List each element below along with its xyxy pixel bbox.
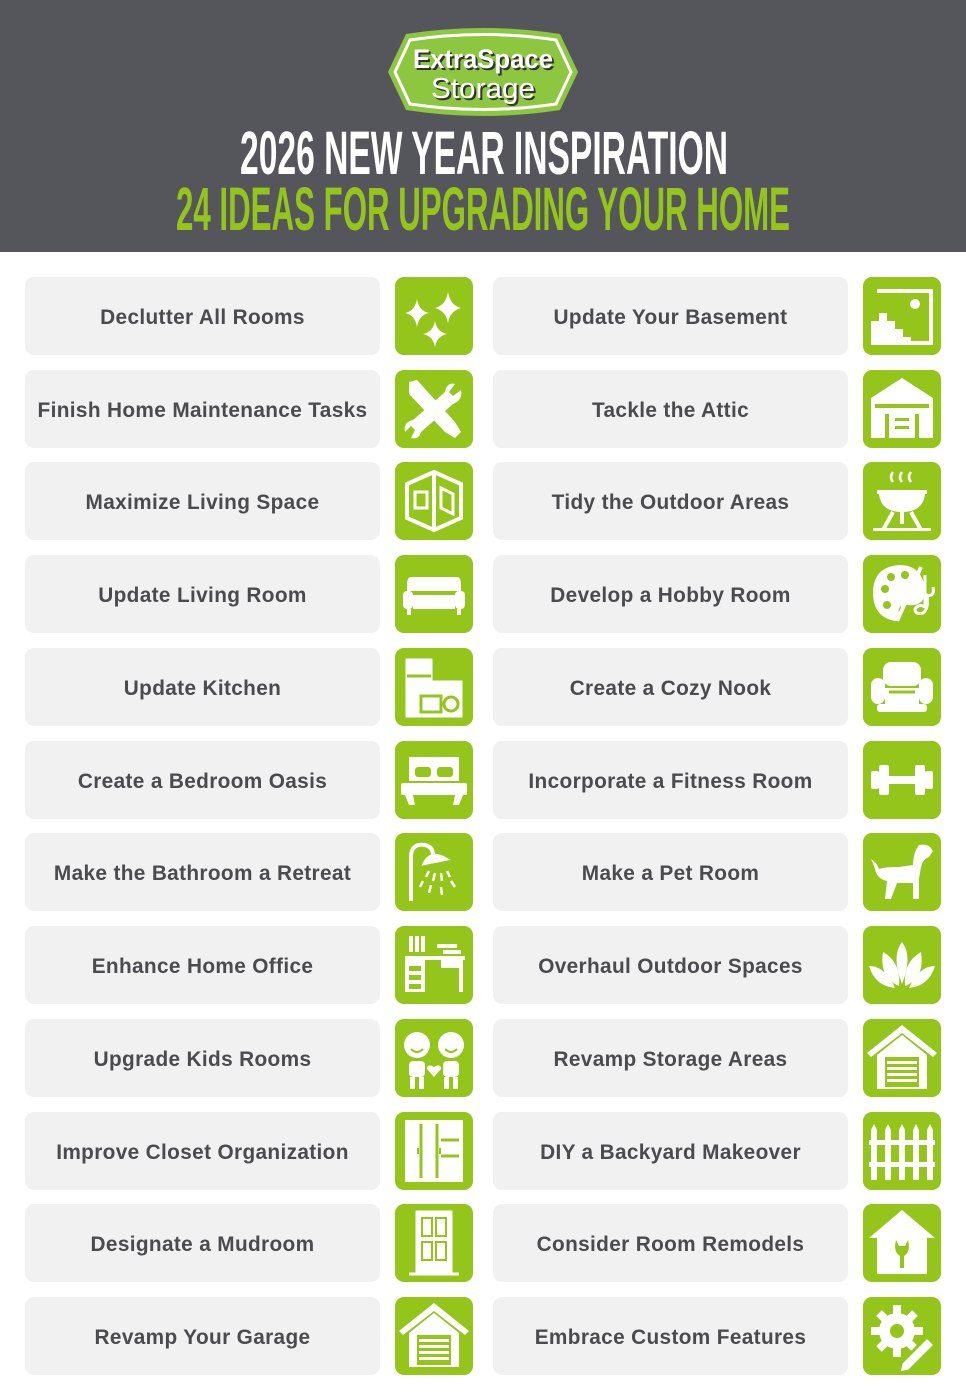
icon: attic house <box>863 370 941 448</box>
text: Update Your Basement <box>554 306 787 329</box>
row 9: Upgrade Kids Rooms <box>94 1048 311 1071</box>
row 6: Create a Bedroom Oasis <box>78 770 327 793</box>
icon: grill <box>863 462 941 540</box>
text: Tackle the Attic <box>592 399 749 422</box>
icon: dog <box>863 833 941 911</box>
icon: gear pencil <box>863 1297 941 1375</box>
text: Embrace Custom Features <box>535 1326 806 1349</box>
row 12 <box>25 1297 380 1375</box>
row 9 <box>25 1019 380 1097</box>
row 2 <box>25 370 380 448</box>
logo: ExtraSpace <box>413 44 553 74</box>
logo <box>388 28 578 116</box>
row 1 <box>25 277 380 355</box>
row 2: Finish Home Maintenance Tasks <box>38 399 367 422</box>
row 8 <box>25 926 380 1004</box>
icon: palette <box>863 555 941 633</box>
logo: ExtraSpace <box>415 46 555 76</box>
text: Revamp Storage Areas <box>554 1048 787 1071</box>
logo: Storage <box>433 75 537 107</box>
icon: sofa <box>395 555 473 633</box>
text: Incorporate a Fitness Room <box>528 770 813 793</box>
row 3: Maximize Living Space <box>86 491 319 514</box>
logo: Storage <box>431 73 535 105</box>
row 4: Update Living Room <box>98 584 307 607</box>
row 12: Revamp Your Garage <box>95 1326 310 1349</box>
row 11 <box>25 1204 380 1282</box>
icon: tools <box>395 370 473 448</box>
icon: basement stairs <box>863 277 941 355</box>
row 7 <box>25 833 380 911</box>
text: Create a Cozy Nook <box>570 677 771 700</box>
icon: room cube <box>395 462 473 540</box>
icon: dumbbell <box>863 741 941 819</box>
title <box>176 120 790 240</box>
row 3 <box>25 462 380 540</box>
icon: kitchen appliances <box>395 648 473 726</box>
icon: kids <box>395 1019 473 1097</box>
icon: fence <box>863 1112 941 1190</box>
row 10: Improve Closet Organization <box>56 1141 349 1164</box>
text: Overhaul Outdoor Spaces <box>538 955 803 978</box>
row 8: Enhance Home Office <box>92 955 313 978</box>
icon: house wrench <box>863 1204 941 1282</box>
row 7: Make the Bathroom a Retreat <box>54 862 351 885</box>
text: Consider Room Remodels <box>537 1233 804 1256</box>
icon: door <box>395 1204 473 1282</box>
row 6 <box>25 741 380 819</box>
icon: shower <box>395 833 473 911</box>
icon: bed <box>395 741 473 819</box>
icon: closet <box>395 1112 473 1190</box>
row 10 <box>25 1112 380 1190</box>
icon: armchair <box>863 648 941 726</box>
icon: garage <box>395 1297 473 1375</box>
row 11: Designate a Mudroom <box>91 1233 314 1256</box>
text: DIY a Backyard Makeover <box>540 1141 801 1164</box>
icon: lotus <box>863 926 941 1004</box>
row 5 <box>25 648 380 726</box>
icon: storage garage <box>863 1019 941 1097</box>
text: Make a Pet Room <box>582 862 759 885</box>
text: Develop a Hobby Room <box>550 584 791 607</box>
header <box>0 0 966 252</box>
text: Tidy the Outdoor Areas <box>552 491 789 514</box>
icon: sparkles <box>395 277 473 355</box>
icon: desk <box>395 926 473 1004</box>
row 1: Declutter All Rooms <box>100 306 305 329</box>
row 5: Update Kitchen <box>124 677 281 700</box>
row 4 <box>25 555 380 633</box>
